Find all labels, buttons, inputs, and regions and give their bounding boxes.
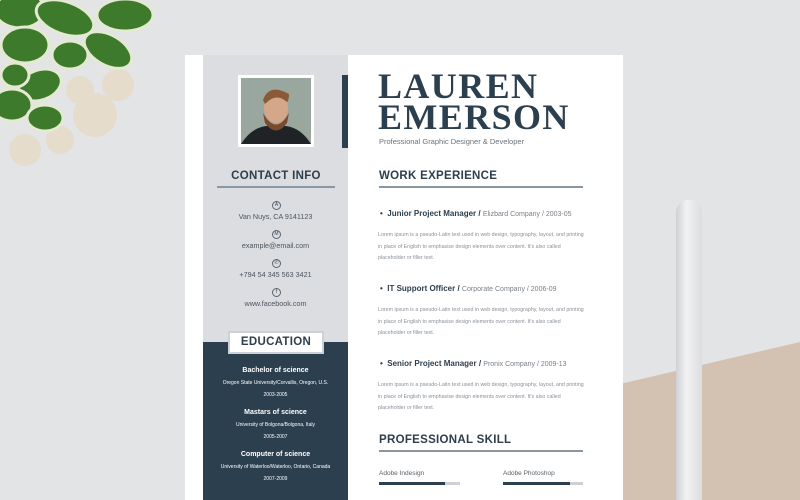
sidebar: [203, 55, 348, 500]
resume paper: [185, 55, 623, 500]
education list: [221, 366, 330, 482]
plant decoration: [0, 0, 154, 166]
heading: contact info: [217, 170, 335, 188]
icon: address: [272, 201, 281, 210]
heading: professional skill: [379, 434, 583, 452]
education list: 2003-2005: [264, 392, 287, 398]
icon: address: A: [275, 202, 278, 208]
work entries: [378, 209, 584, 411]
education list: Oregon State University/Corvallis, Oregon, U.S.: [223, 380, 328, 386]
name: EMERSON: [378, 97, 570, 137]
icon: email: M: [274, 231, 279, 237]
heading: education: [228, 331, 324, 354]
icon: email: [272, 230, 281, 239]
work entries: Lorem ipsum is a pseudo-Latin text used in web design, typography, layout, and printing in place of English to emphasise design elements over content. It's also called placeholder or filler text.: [378, 307, 584, 336]
education list: University of Waterloo/Waterloo, Ontario, Canada: [221, 464, 330, 470]
education list: Bachelor of science: [242, 367, 309, 374]
education list: Computer of science: [241, 451, 310, 458]
heading: education: EDUCATION: [241, 336, 311, 348]
pen: [676, 200, 702, 500]
contact list: +794 54 345 563 3421: [239, 270, 312, 279]
icon: facebook: [272, 288, 281, 297]
skills: Adobe Indesign: [379, 470, 424, 477]
work entries: Lorem ipsum is a pseudo-Latin text used in web design, typography, layout, and printing in place of English to emphasise design elements over content. It's also called placeholder or filler text.: [378, 382, 584, 411]
icon: phone: [272, 259, 281, 268]
education list: 2007-2009: [264, 476, 287, 482]
heading: work experience: [379, 170, 583, 188]
education list: University of Bolgona/Bolgona, Italy: [236, 422, 315, 428]
contact list: Van Nuys, CA 9141123: [239, 212, 312, 221]
education list: Mastars of science: [244, 409, 307, 416]
accent bar: [342, 75, 348, 148]
work entries: • Senior Project Manager / Pronix Company / 2009-13: [380, 359, 567, 368]
contact list: [238, 201, 312, 308]
icon: facebook: f: [276, 289, 277, 295]
heading: work experience: WORK EXPERIENCE: [379, 170, 497, 182]
education list: 2005-2007: [264, 434, 287, 440]
work entries: Lorem ipsum is a pseudo-Latin text used in web design, typography, layout, and printing in place of English to emphasise design elements over content. It's also called placeholder or filler text.: [378, 232, 584, 261]
heading: contact info: CONTACT INFO: [231, 170, 321, 182]
skills: Adobe Photoshop: [503, 470, 555, 477]
subtitle: Professional Graphic Designer & Developer: [379, 137, 524, 146]
icon: phone: ✆: [274, 260, 279, 266]
sidebar dark block: [203, 342, 348, 500]
contact list: example@email.com: [242, 241, 309, 250]
work entries: • Junior Project Manager / Elizbard Company / 2003-05: [380, 209, 572, 218]
contact list: www.facebook.com: [245, 299, 306, 308]
work entries: • IT Support Officer / Corporate Company / 2006-09: [380, 284, 556, 293]
name: LAUREN: [378, 66, 538, 106]
name: [378, 66, 570, 137]
skills: [379, 470, 583, 485]
photo: [238, 75, 314, 147]
heading: professional skill: PROFESSIONAL SKILL: [379, 434, 511, 446]
